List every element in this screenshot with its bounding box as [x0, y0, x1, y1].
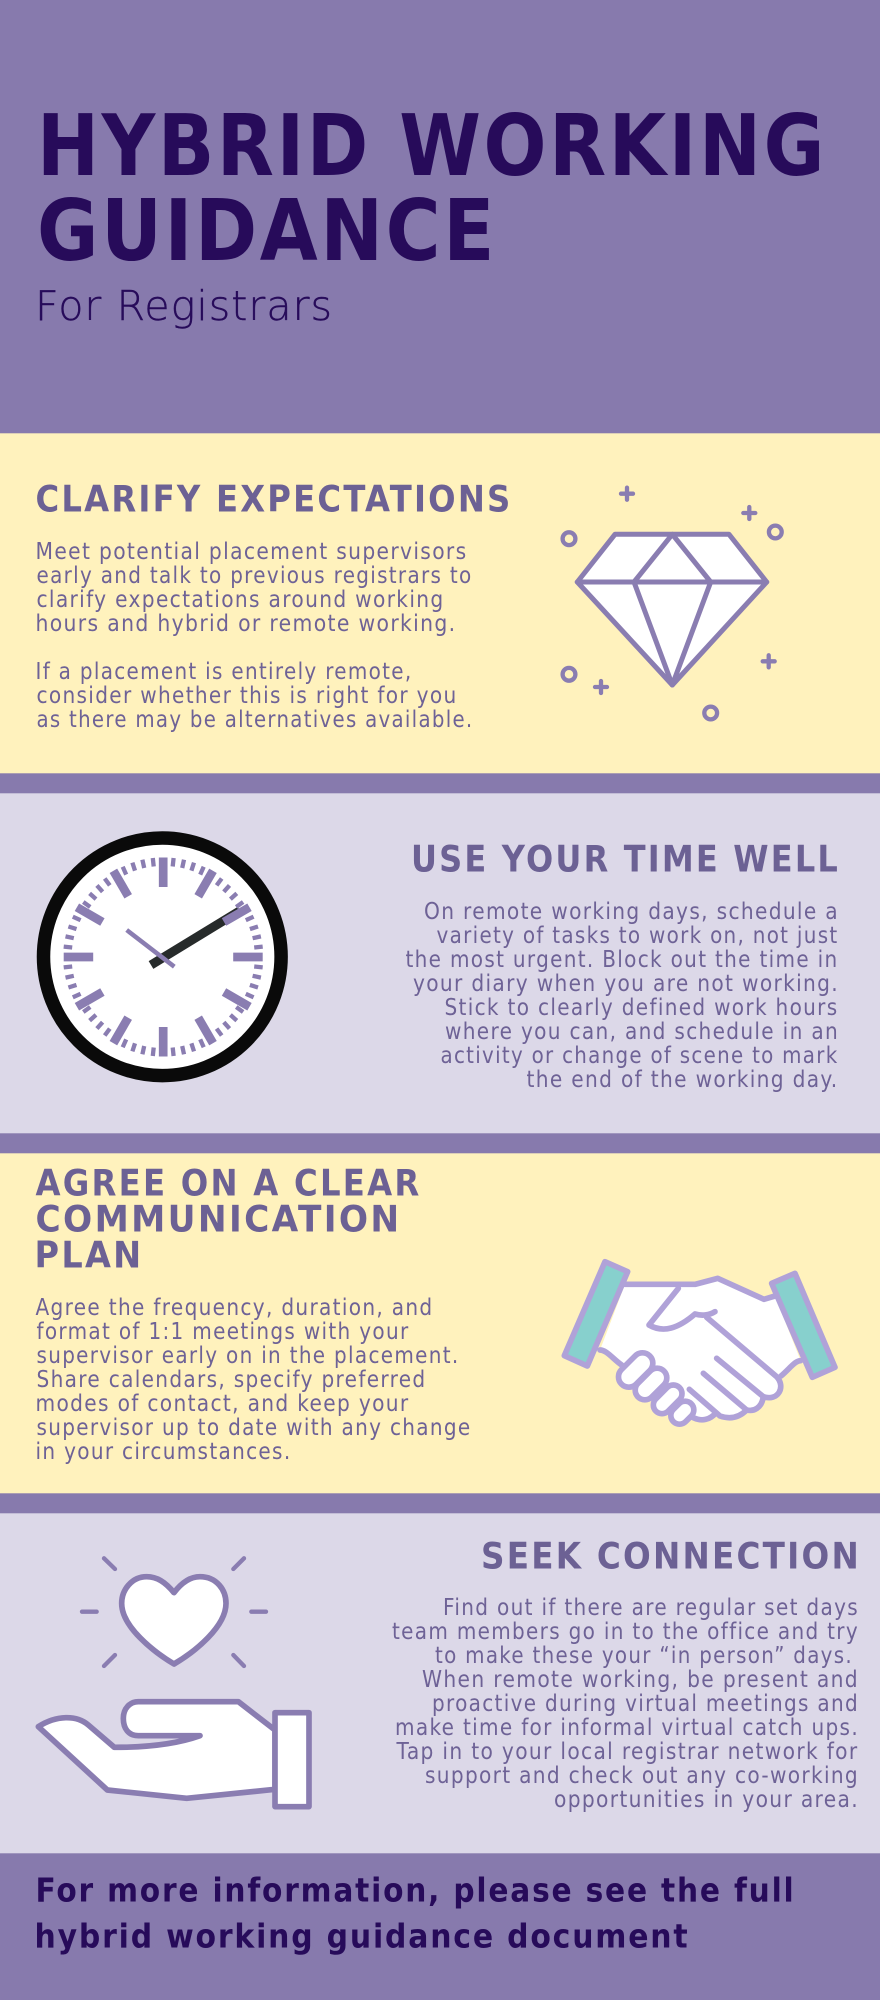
text block: communication plan: format of 1:1 meetings with your — [36, 1319, 410, 1345]
panel: clarify expectations — [0, 433, 880, 773]
heading: agree on a clear communication plan: COMMUNICATION — [36, 1198, 402, 1241]
text block: communication plan — [36, 1295, 472, 1465]
icon: diamond — [563, 488, 782, 719]
footer panel: For more information, please see the full — [36, 1871, 796, 1910]
footer panel — [34, 1871, 796, 1956]
text block: seek connection — [392, 1595, 859, 1813]
title — [37, 97, 827, 281]
clock tick marks — [64, 858, 263, 1056]
open hand — [38, 1702, 275, 1798]
title: GUIDANCE — [37, 182, 497, 281]
text block: use your time well: the end of the working day. — [526, 1067, 838, 1093]
heading: agree on a clear communication plan: AGREE ON A CLEAR — [36, 1162, 422, 1205]
heart — [122, 1577, 226, 1664]
text block: communication plan: in your circumstances. — [36, 1439, 292, 1465]
text block: clarify expectations: early and talk to previous registrars to — [36, 563, 472, 589]
text block: clarify expectations: clarify expectations around working — [36, 587, 444, 613]
text block: clarify expectations: Meet potential placement supervisors — [36, 539, 468, 565]
subtitle: For Registrars — [35, 282, 333, 330]
text block: clarify expectations — [36, 539, 474, 733]
clock second hand — [127, 930, 174, 967]
text block: clarify expectations: hours and hybrid or remote working. — [36, 611, 456, 637]
panel: communication plan — [0, 1153, 880, 1493]
footer panel: hybrid working guidance document — [34, 1917, 690, 1956]
text block: communication plan: Agree the frequency, duration, and — [36, 1295, 434, 1321]
icon: handshake — [564, 1262, 835, 1428]
rays — [82, 1558, 266, 1666]
text block: communication plan: Share calendars, specify preferred — [36, 1367, 426, 1393]
text block: clarify expectations: If a placement is entirely remote, — [36, 659, 412, 685]
heading: agree on a clear communication plan — [34, 1162, 422, 1277]
icon: clock — [44, 838, 281, 1076]
text block: communication plan: supervisor up to date with any change — [36, 1415, 472, 1441]
text block: communication plan: supervisor early on in the placement. — [36, 1343, 460, 1369]
panel: seek connection — [0, 1513, 880, 1853]
heading: agree on a clear communication plan: PLAN — [34, 1234, 144, 1277]
icon: hand holding heart — [38, 1558, 309, 1807]
heading: clarify expectations: CLARIFY EXPECTATIONS — [36, 478, 512, 521]
header panel — [35, 97, 827, 330]
text block: communication plan: modes of contact, and keep your — [36, 1391, 410, 1417]
text block: clarify expectations: as there may be alternatives available. — [36, 707, 474, 733]
clock hour hand — [151, 911, 240, 965]
text block: use your time well — [406, 899, 839, 1093]
panel: use your time well — [0, 793, 880, 1133]
text block: clarify expectations: consider whether this is right for you — [36, 683, 458, 709]
cuff — [275, 1713, 309, 1807]
